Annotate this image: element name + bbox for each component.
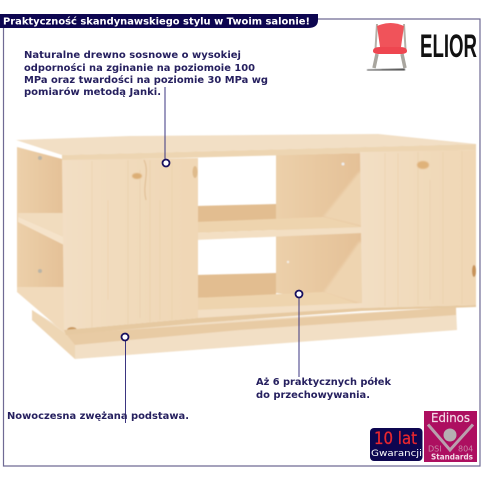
- badge: Edinos standards: Standards: [431, 452, 474, 462]
- callout text: material: pomiarów metodą Janki.: [24, 86, 161, 98]
- base plinth: [32, 307, 457, 359]
- callout text: shelves: [256, 376, 391, 401]
- marker: door: [162, 160, 170, 166]
- callout text: material: odporności na zginanie na poziomoie 100: [24, 62, 255, 74]
- callout text: base: Nowoczesna zwężana podstawa.: [7, 411, 189, 422]
- right door: [360, 150, 476, 308]
- callout line: shelves: [298, 297, 300, 377]
- callout text: material: [24, 50, 268, 98]
- marker: base: [122, 334, 128, 340]
- marker: shelves: [296, 290, 302, 298]
- badge: 10 years warranty: Gwarancji: [371, 449, 422, 459]
- top board: [16, 134, 476, 161]
- badge: Edinos standards: [424, 411, 477, 462]
- badge: 10 years warranty: 10 lat: [374, 429, 417, 448]
- furniture: pine coffee table: [16, 134, 476, 359]
- badge: Edinos standards: DSI: [428, 444, 442, 454]
- badge: Edinos standards: 804: [458, 444, 473, 454]
- badge: 10 years warranty: [370, 428, 422, 461]
- callout line: material: [164, 87, 166, 160]
- middle open shelves: [195, 153, 363, 322]
- header banner: Praktyczność skandynawskiego stylu w Twoim salonie!: [3, 16, 310, 28]
- badge: Edinos standards: Edinos: [431, 411, 470, 425]
- door bottom rail: [64, 305, 476, 335]
- callout text: shelves: do przechowywania.: [256, 390, 370, 401]
- callout text: shelves: Aż 6 praktycznych półek: [256, 376, 391, 388]
- icon: red chair: [367, 23, 407, 70]
- left door: [62, 158, 198, 333]
- left side compartment: [17, 147, 66, 334]
- callout text: material: Naturalne drewno sosnowe o wysokiej: [24, 50, 241, 61]
- callout line: base: [124, 340, 126, 423]
- callout text: material: MPa oraz twardości na poziomie 30 MPa wg: [24, 74, 268, 86]
